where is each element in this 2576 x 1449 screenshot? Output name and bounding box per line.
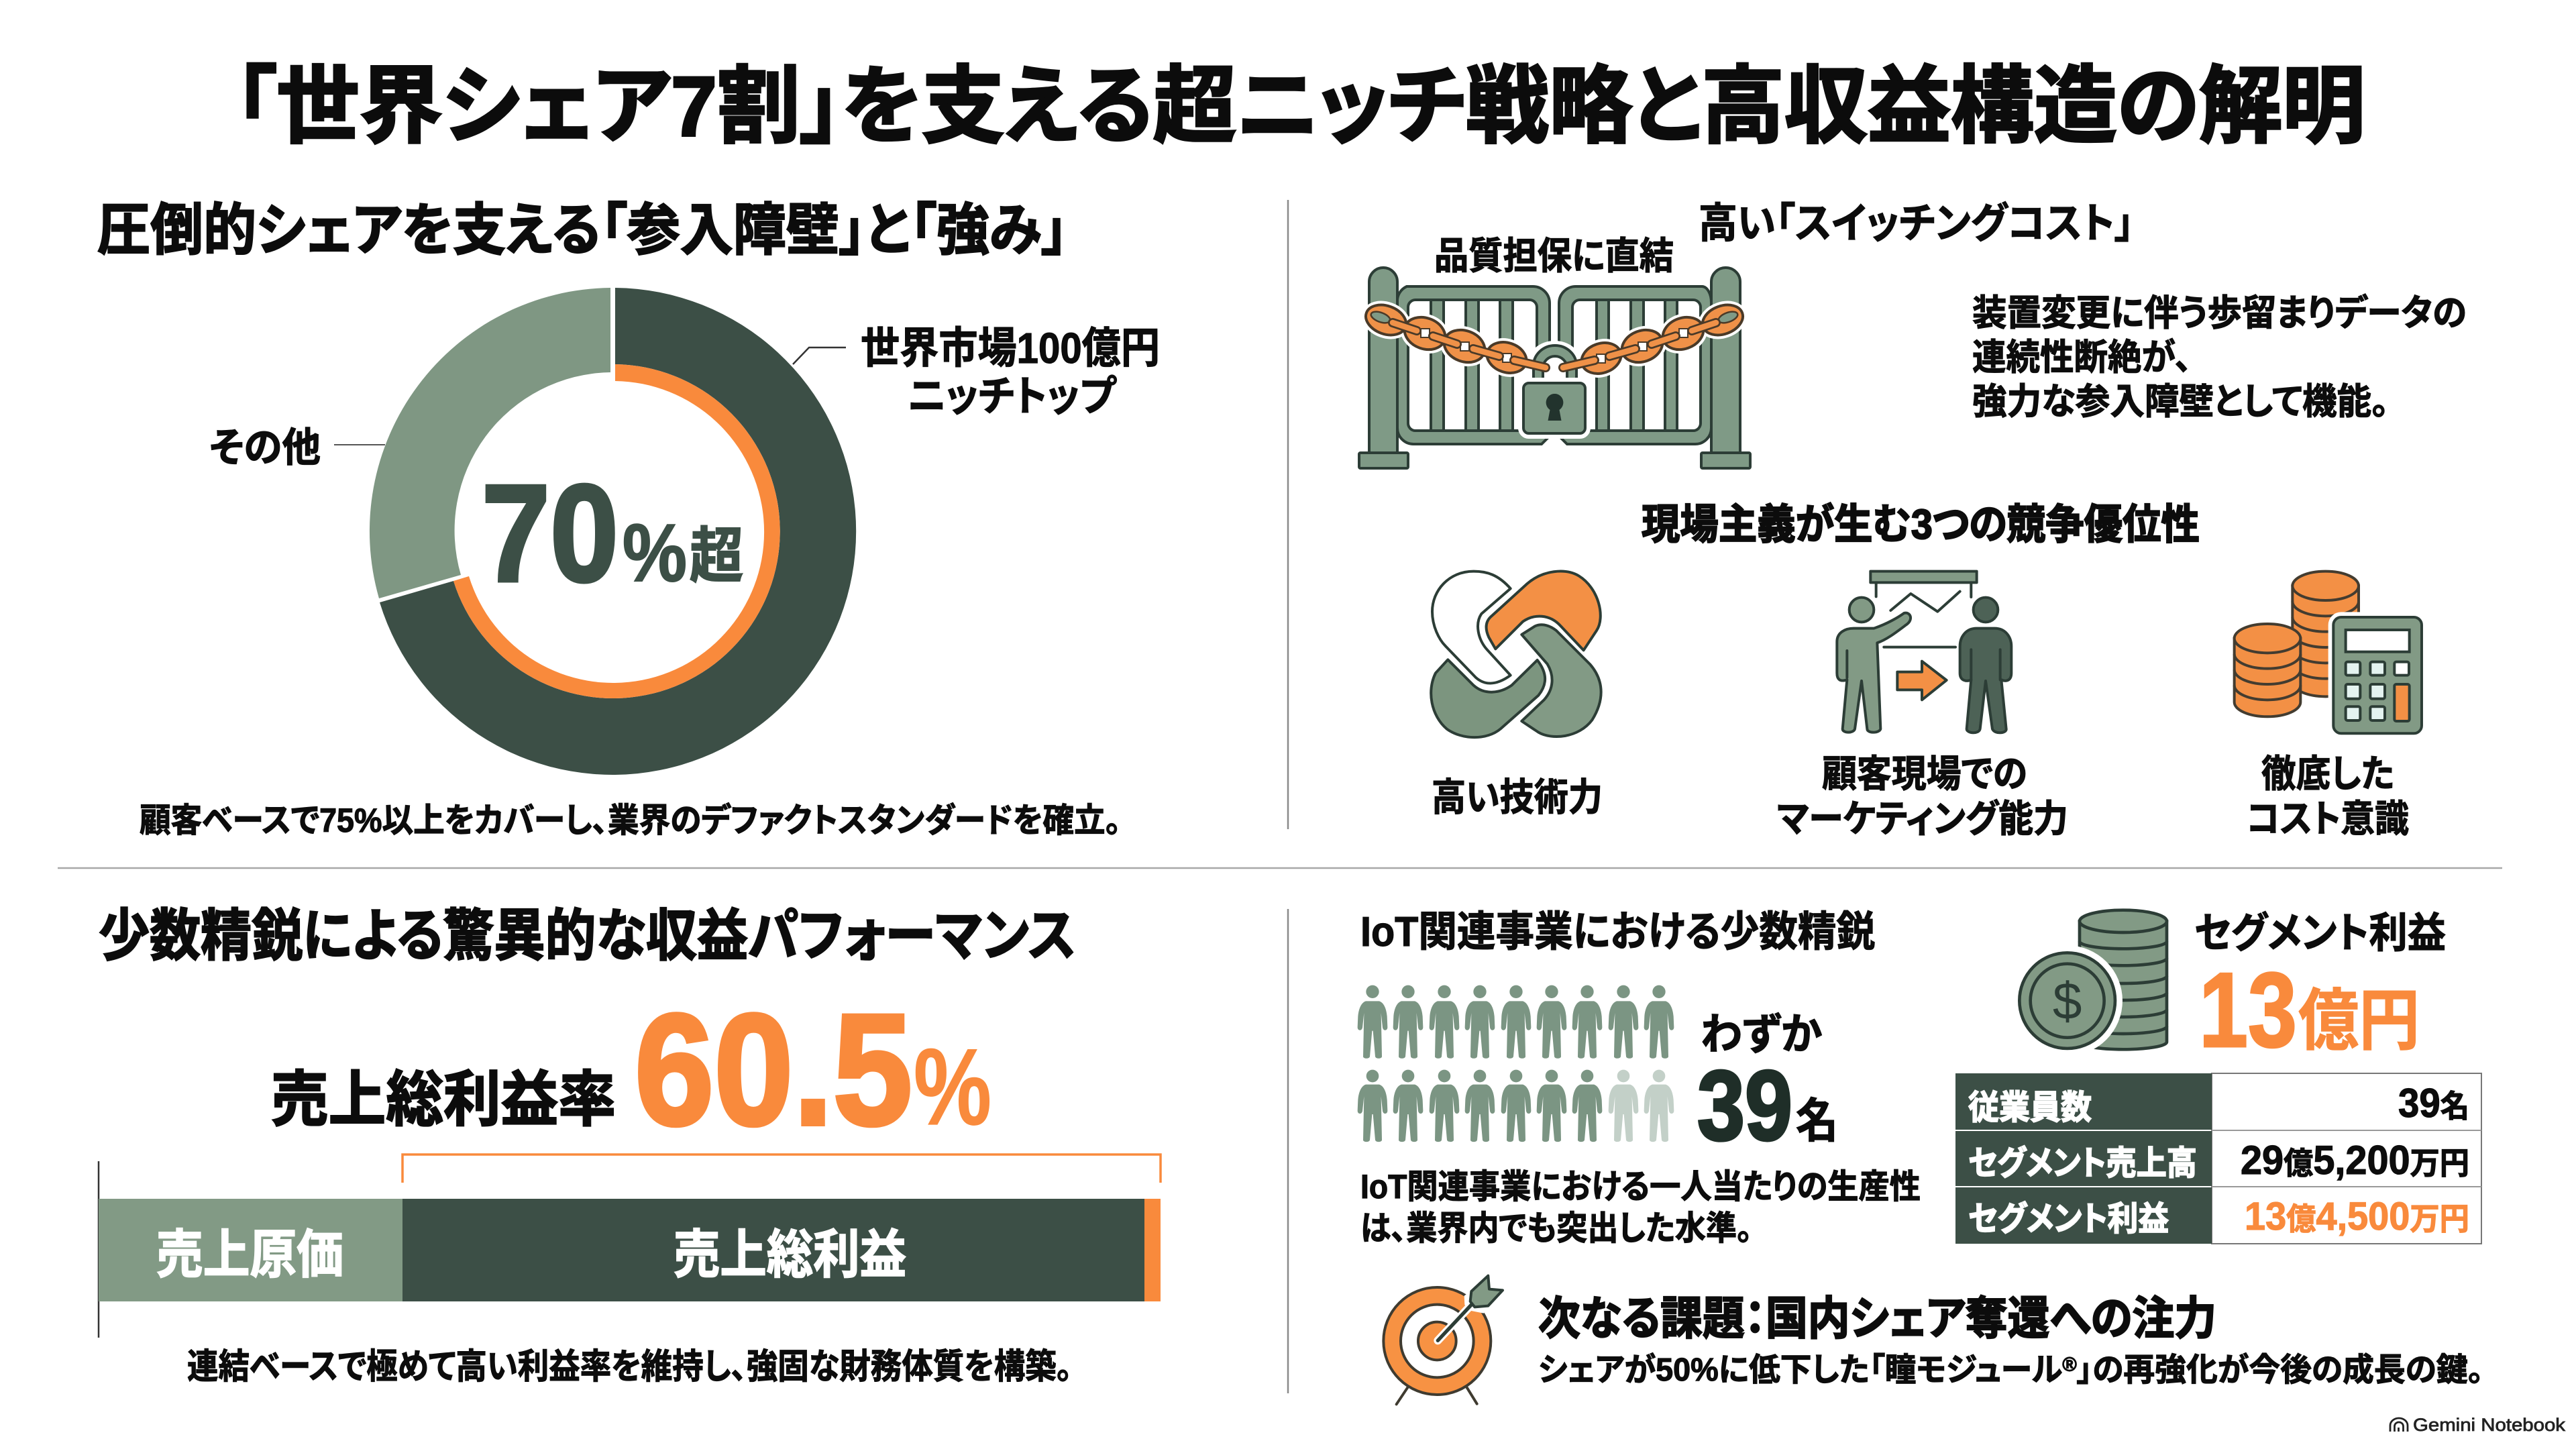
metric: 13 billion yen: 億円 bbox=[2298, 983, 2420, 1059]
text: next challenge: ® bbox=[2062, 1354, 2077, 1376]
text: productivity: は、業界内でも突出した水準。 bbox=[1360, 1210, 1752, 1247]
center value: 70%超 bbox=[482, 456, 743, 610]
center value: 70%超: 超 bbox=[690, 523, 743, 590]
text: switching cost explanation: 装置変更に伴う歩留まりデータの bbox=[1972, 293, 2467, 333]
donut label: niche top: 世界市場100億円 bbox=[861, 324, 1160, 372]
icon: coin stack bbox=[2012, 910, 2167, 1056]
metric: only 39 people bbox=[1697, 1010, 1838, 1161]
stacked bar: cost vs gross profit bbox=[99, 1199, 1161, 1301]
table: segment data: 29億5,200万円 bbox=[2241, 1138, 2469, 1183]
metric: gross margin 60.5%: % bbox=[914, 1026, 991, 1148]
text: productivity: IoT関連事業における一人当たりの生産性 bbox=[1360, 1168, 1921, 1205]
text: next challenge: 次なる課題：国内シェア奪還への注力 bbox=[1538, 1293, 2216, 1344]
stacked bar: cost vs gross profit: 売上総利益 bbox=[674, 1225, 906, 1284]
label: marketing: マーケティング能力 bbox=[1777, 798, 2068, 840]
stacked bar: cost vs gross profit: 売上原価 bbox=[156, 1225, 343, 1284]
heading: segment profit: セグメント利益 bbox=[2194, 910, 2446, 957]
icon: coins and calculator bbox=[2235, 572, 2422, 733]
metric: only 39 people: 39 bbox=[1697, 1051, 1792, 1161]
center value: 70%超: 70 bbox=[482, 456, 619, 610]
caption: customer base: 顧客ベースで75%以上をカバーし、業界のデファクトスタンダードを確立。 bbox=[140, 802, 1121, 839]
panel: next challenge bbox=[1383, 1276, 2483, 1404]
donut label: niche top bbox=[793, 324, 1160, 420]
heading: performance: 少数精鋭による驚異的な収益パフォーマンス bbox=[99, 904, 1076, 967]
metric: 13 billion yen: 13 bbox=[2199, 951, 2297, 1069]
pictogram: 39 employees bbox=[1358, 985, 1674, 1142]
icon: presenter and customer bbox=[1837, 572, 2011, 733]
label: marketing bbox=[1777, 753, 2068, 840]
panel: three competitive advantages bbox=[1431, 502, 2422, 840]
table: segment data bbox=[1955, 1073, 2481, 1244]
icon: interlocked links bbox=[1431, 572, 1601, 737]
heading: advantages: 現場主義が生む3つの競争優位性 bbox=[1642, 502, 2200, 548]
metric: gross margin 60.5%: 60.5 bbox=[635, 981, 912, 1159]
text: next challenge: シェアが50%に低下した「瞳モジュール bbox=[1538, 1352, 2076, 1388]
text: next challenge: 」 bbox=[2077, 1352, 2092, 1388]
table: segment data: セグメント利益 bbox=[1968, 1200, 2169, 1238]
heading: switching cost: 高い「スイッチングコスト」 bbox=[1699, 201, 2134, 247]
panel: switching cost bbox=[1359, 201, 2467, 468]
table: segment data: セグメント売上高 bbox=[1968, 1144, 2197, 1182]
text: switching cost explanation bbox=[1972, 293, 2467, 422]
label: quality: 品質担保に直結 bbox=[1434, 235, 1674, 277]
panel: market share and barriers bbox=[97, 199, 1160, 839]
metric: gross margin 60.5% bbox=[271, 981, 991, 1159]
donut label: others: その他 bbox=[209, 425, 321, 470]
icon: target with arrow bbox=[1383, 1276, 1503, 1404]
panel: profit performance bbox=[99, 904, 1161, 1387]
caption: margin: 連結ベースで極めて高い利益率を維持し、強固な財務体質を構築。 bbox=[187, 1348, 1072, 1387]
table: segment data: 13億4,500万円 bbox=[2245, 1195, 2469, 1238]
panel: IoT headcount bbox=[1358, 909, 1921, 1247]
bracket over gross profit bbox=[402, 1155, 1161, 1183]
label: marketing: 顧客現場での bbox=[1822, 753, 2027, 795]
label: technology: 高い技術力 bbox=[1432, 776, 1603, 819]
metric: only 39 people: わずか bbox=[1701, 1010, 1822, 1059]
metric: 13 billion yen bbox=[2199, 951, 2420, 1069]
center value: 70%超: % bbox=[623, 507, 687, 598]
text: next challenge: の再強化が今後の成長の鍵。 bbox=[2092, 1352, 2493, 1388]
label: cost awareness: 徹底した bbox=[2261, 753, 2394, 795]
metric: gross margin 60.5%: 売上総利益率 bbox=[271, 1067, 616, 1134]
logo: Gemini Notebook: Gemini Notebook bbox=[2413, 1415, 2566, 1435]
text: switching cost explanation: 連続性断絶が、 bbox=[1972, 337, 2192, 378]
donut label: niche top: ニッチトップ bbox=[908, 374, 1117, 420]
heading: share: 圧倒的シェアを支える「参入障壁」と「強み」 bbox=[97, 199, 1068, 262]
text: next challenge bbox=[1538, 1293, 2483, 1388]
metric: only 39 people: 名 bbox=[1796, 1095, 1838, 1147]
icon: coin stack: $ bbox=[2053, 971, 2082, 1030]
panel: segment profit bbox=[1955, 910, 2481, 1244]
label: cost awareness bbox=[2247, 753, 2409, 840]
text: productivity bbox=[1360, 1168, 1921, 1247]
text: switching cost explanation: 強力な参入障壁として機能。 bbox=[1972, 382, 2389, 422]
label: cost awareness: コスト意識 bbox=[2247, 798, 2409, 840]
donut chart: 70% share bbox=[370, 288, 856, 775]
icon: locked gate with chain bbox=[1359, 268, 1750, 468]
table: segment data: 39名 bbox=[2398, 1081, 2469, 1126]
title: 「世界シェア7割」を支える超ニッチ戦略と高収益構造の解明 bbox=[235, 59, 2365, 154]
table: segment data: 従業員数 bbox=[1968, 1089, 2092, 1126]
heading: IoT: IoT関連事業における少数精鋭 bbox=[1360, 909, 1875, 955]
